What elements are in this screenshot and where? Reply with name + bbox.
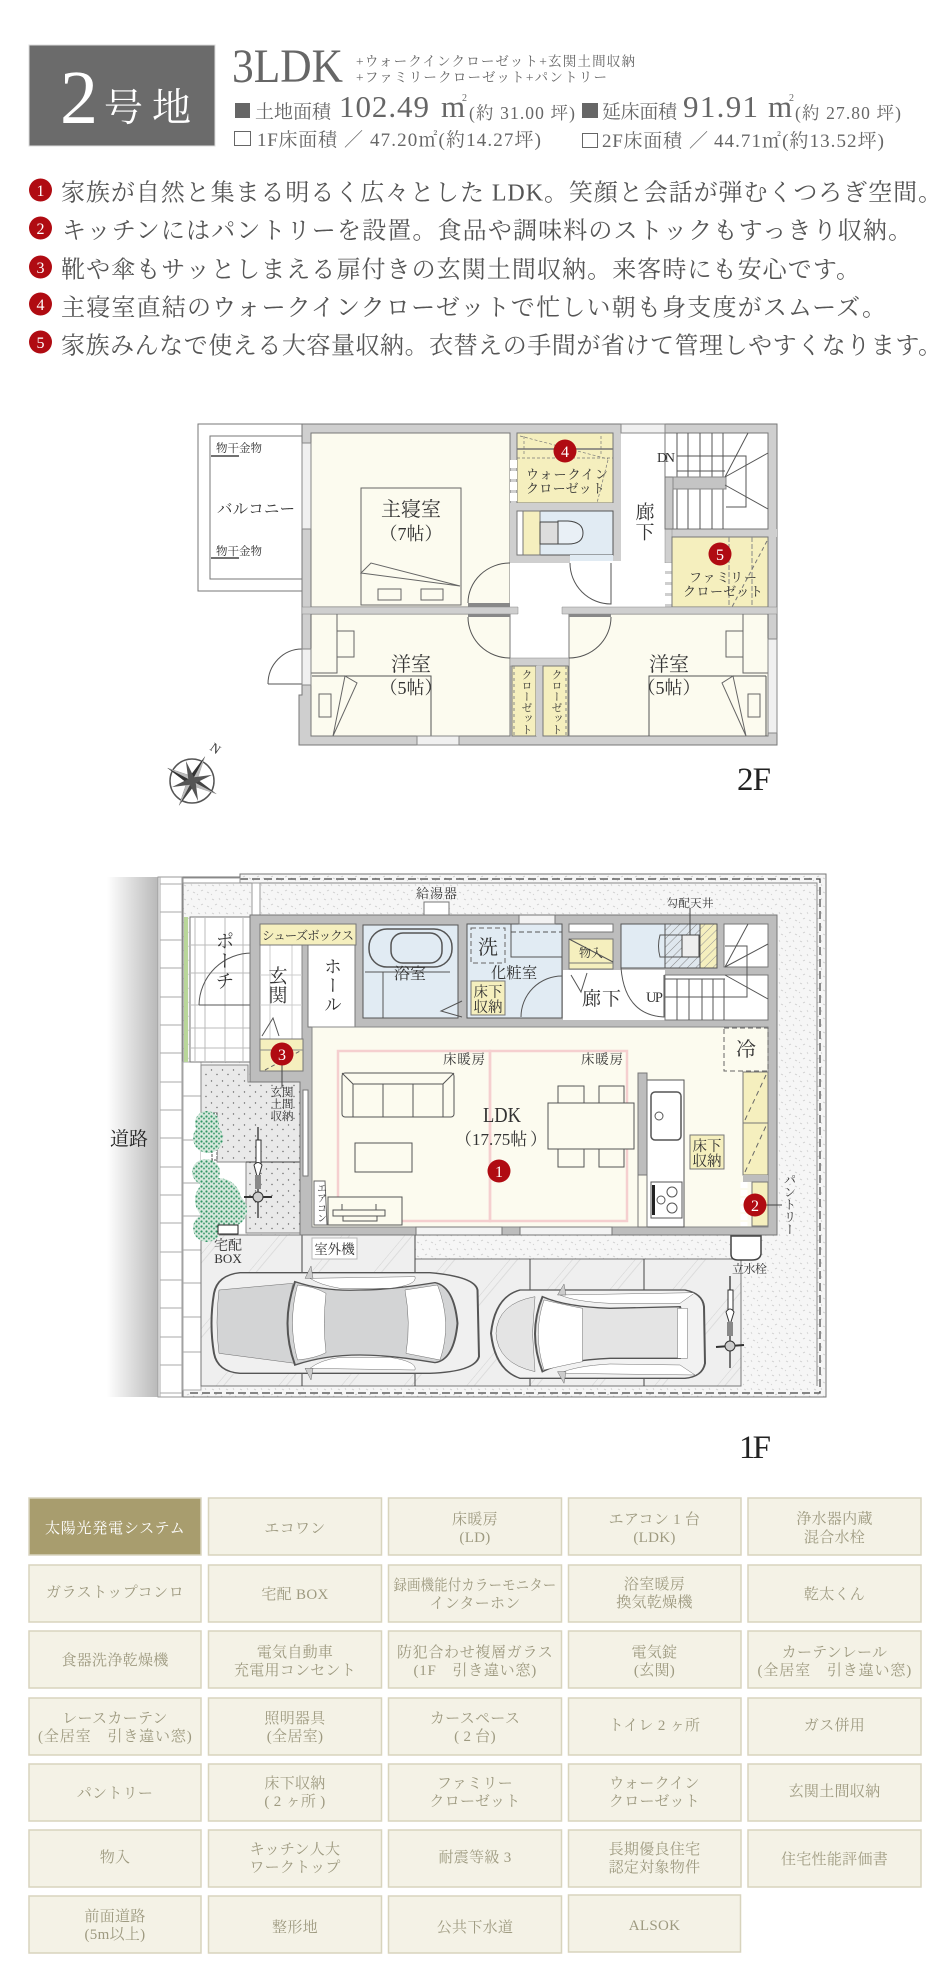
tv board xyxy=(328,1197,402,1225)
tag: public sewer xyxy=(388,1896,562,1953)
tag: glass cooktop xyxy=(29,1565,201,1622)
tag: public sewer: 公共下水道 xyxy=(437,1919,513,1936)
feature 5: 家族みんなで使える大容量収納。衣替えの手間が省けて管理しやすくなります。 xyxy=(61,332,942,360)
bicycle 1 xyxy=(244,1127,272,1218)
tag: car space: カースペース xyxy=(430,1711,520,1727)
bicycle 2 xyxy=(716,1276,744,1368)
corridor 1F: 物入 xyxy=(579,945,603,960)
walk-in closet: クローゼット xyxy=(526,481,605,496)
stairs 2F: DN xyxy=(657,451,675,466)
tag: two toilets: トイレ 2 ヶ所 xyxy=(609,1717,700,1734)
compass: N xyxy=(207,739,224,758)
parcel box xyxy=(214,1225,242,1266)
tag: family closet xyxy=(388,1764,562,1821)
bedroom closets: クローゼット xyxy=(520,669,532,735)
tag: security glass xyxy=(388,1631,562,1688)
underfloor storage: 収納 xyxy=(474,999,502,1016)
land area: m xyxy=(441,89,465,124)
tag: lace curtain xyxy=(29,1698,201,1755)
tag: air conditioner: (LDK) xyxy=(633,1530,676,1546)
tag: kitchen worktop: ワークトップ xyxy=(249,1859,341,1876)
tag: ALSOK xyxy=(568,1895,740,1952)
master bedroom: （7帖） xyxy=(380,524,442,544)
tag: seismic grade xyxy=(388,1830,562,1887)
callout 1 xyxy=(488,1160,510,1182)
plan type heading: 3LDK xyxy=(232,40,343,93)
tag: bathroom heater: 換気乾燥機 xyxy=(616,1593,693,1611)
balcony: 物干金物 xyxy=(216,544,262,558)
powder room: 化粧室 xyxy=(491,964,537,982)
callout 5: 5 xyxy=(716,547,724,564)
stairs 1F xyxy=(646,924,768,1020)
tag: car space: ( 2 台) xyxy=(454,1728,496,1745)
corridor: 廊下 xyxy=(632,502,654,542)
tag: electric lock: (玄関) xyxy=(634,1661,675,1679)
LDK: 17.75帖 xyxy=(472,1130,527,1149)
parking area xyxy=(201,1235,741,1386)
tag: electric lock xyxy=(568,1631,741,1688)
family closet: クローゼット xyxy=(683,584,763,599)
entry and hall: ホール xyxy=(322,957,342,1014)
family closet xyxy=(665,529,777,607)
toilet 1F: 勾配天井 xyxy=(666,896,714,910)
tag: front road: 前面道路 xyxy=(84,1908,146,1925)
tag: lace curtain: (全居室 引き違い窓) xyxy=(38,1727,192,1745)
2F floor area: 2F床面積 xyxy=(602,130,684,152)
2F floor area: ／ xyxy=(689,130,708,152)
tag: gas xyxy=(748,1698,921,1755)
entry storage: 土間 xyxy=(270,1097,294,1111)
tag: eco one xyxy=(208,1498,382,1555)
feature 2: キッチンにはパントリーを設置。食品や調味料のストックもすっきり収納。 xyxy=(62,218,912,244)
tag: performance report: 住宅性能評価書 xyxy=(781,1851,888,1868)
tag: intercom xyxy=(388,1565,562,1622)
tag: bathroom heater xyxy=(568,1565,741,1622)
tag: electric lock: 電気錠 xyxy=(632,1644,677,1661)
kitchen xyxy=(638,1028,768,1227)
tag: long-life housing xyxy=(568,1830,741,1887)
powder room: 洗 xyxy=(478,936,498,959)
lot boundary xyxy=(183,874,826,1397)
LDK: ） xyxy=(530,1130,547,1149)
callout 1: 1 xyxy=(495,1164,503,1181)
tag: dishwasher xyxy=(29,1631,201,1688)
exterior walls xyxy=(299,424,777,745)
2F floor area xyxy=(582,130,884,152)
floor label 1F: 1F xyxy=(739,1430,771,1466)
tag: regular plot xyxy=(208,1896,382,1953)
bedroom west: （5帖） xyxy=(380,678,442,698)
tag: air conditioner: エアコン 1 台 xyxy=(609,1511,700,1528)
feature 3: 靴や傘もサッとしまえる扉付きの玄関土間収納。来客時にも安心です。 xyxy=(61,256,860,284)
tag: water faucet: 浄水器内蔵 xyxy=(796,1510,873,1528)
sofa xyxy=(342,1073,454,1117)
feature list xyxy=(29,178,942,360)
callout 4: 4 xyxy=(561,444,569,461)
underfloor storage xyxy=(690,1135,724,1170)
floor heating zones xyxy=(338,1051,627,1221)
land area: 2 xyxy=(462,93,467,104)
2F floor area: 44.71㎡(約13.52坪) xyxy=(714,130,884,152)
total floor area: 2 xyxy=(789,93,794,104)
tag: walk-in closet: クローゼット xyxy=(609,1794,700,1810)
feature 4: 主寝室直結のウォークインクローゼットで忙しい朝も身支度がスムーズ。 xyxy=(61,294,886,322)
header badge: lot number: 号地 xyxy=(104,87,191,130)
bedroom closets xyxy=(510,658,569,736)
callout 2: 2 xyxy=(751,1198,759,1215)
tag: glass cooktop: ガラストップコンロ xyxy=(46,1584,184,1601)
walk-in closet xyxy=(514,433,613,503)
tag: underfloor storage: ( 2 ヶ所 ) xyxy=(264,1793,326,1810)
bedroom closets: クローゼット xyxy=(550,669,562,735)
total floor area: m xyxy=(768,89,792,124)
tag: walk-in closet xyxy=(568,1764,741,1821)
bedroom west: 洋室 xyxy=(391,653,431,676)
tag: solar power xyxy=(29,1498,201,1555)
bedroom east: （5帖） xyxy=(638,678,700,698)
tag: front road xyxy=(29,1896,201,1953)
total floor area: (約 27.80 坪) xyxy=(795,103,901,123)
floor plan 1F xyxy=(107,874,826,1397)
tag: car space xyxy=(388,1698,562,1755)
underfloor storage: 収納 xyxy=(692,1153,722,1170)
toilet 2F xyxy=(510,503,621,563)
tag: floor heating xyxy=(388,1498,562,1555)
fridge: 冷 xyxy=(736,1038,756,1061)
floor plan 2F xyxy=(198,424,777,745)
feature 2: 2 xyxy=(36,221,44,238)
air conditioner: エアコン xyxy=(314,1183,326,1223)
total floor area xyxy=(582,89,901,124)
callout 2 xyxy=(744,1194,766,1216)
tag: floor heating: 床暖房 xyxy=(452,1511,498,1528)
tag: curtain rail xyxy=(748,1631,921,1688)
bedroom west xyxy=(311,614,510,736)
tag: walk-in closet: ウォークイン xyxy=(609,1776,700,1792)
plan type heading: +ファミリークローゼット+パントリー xyxy=(356,70,607,85)
header badge: lot number: 2 xyxy=(60,56,98,140)
tag: seismic grade: 耐震等級 3 xyxy=(438,1849,512,1866)
feature 1: 家族が自然と集まる明るく広々とした LDK。笑顔と会話が弾むくつろぎ空間。 xyxy=(61,180,942,206)
pantry xyxy=(743,1072,796,1236)
tag: solar power: 太陽光発電システム xyxy=(45,1520,185,1537)
tag: lace curtain: レースカーテン xyxy=(62,1711,168,1727)
plan type heading: +ウォークインクローゼット+玄関土間収納 xyxy=(356,53,635,69)
header badge: lot number xyxy=(29,45,215,146)
1F floor area xyxy=(234,129,541,151)
1F floor area: 47.20㎡(約14.27坪) xyxy=(370,129,541,151)
tag: two toilets xyxy=(568,1698,741,1755)
floor heating zones: 床暖房 xyxy=(443,1051,485,1067)
tag: curtain rail: (全居室 引き違い窓) xyxy=(758,1661,912,1679)
coffee table xyxy=(355,1143,412,1172)
balcony xyxy=(198,424,302,591)
exterior details 1F: 室外機 xyxy=(314,1241,355,1257)
tag: dishwasher: 食器洗浄乾燥機 xyxy=(61,1651,169,1669)
parcel box: BOX xyxy=(214,1251,242,1266)
floor heating zones: 床暖房 xyxy=(581,1051,623,1067)
compass xyxy=(154,739,230,819)
tag: kitchen worktop: キッチン人大 xyxy=(250,1841,340,1858)
tag: floor heating: (LD) xyxy=(459,1530,491,1546)
porch: ポーチ xyxy=(212,931,234,991)
road xyxy=(107,877,158,1397)
corridor 1F xyxy=(563,924,665,1020)
tag: underfloor storage xyxy=(208,1764,382,1821)
pantry: パントリー xyxy=(782,1173,796,1236)
tag: front road: (5m以上) xyxy=(85,1926,145,1943)
master bedroom: 主寝室 xyxy=(381,498,441,521)
tag: gas dryer xyxy=(748,1565,921,1622)
equipment grid xyxy=(29,1498,921,1953)
dining set xyxy=(548,1086,634,1167)
tag: lighting: 照明器具 xyxy=(264,1710,326,1727)
tag: gas: ガス併用 xyxy=(804,1717,865,1734)
fridge xyxy=(724,1028,768,1071)
car 2 xyxy=(491,1284,705,1383)
1F floor area: 1F床面積 xyxy=(257,129,339,151)
corridor 1F: 廊下 xyxy=(582,988,622,1010)
underfloor storage xyxy=(471,981,505,1016)
tag: air conditioner xyxy=(568,1498,741,1555)
feature 4: 4 xyxy=(36,297,44,314)
total floor area: 91.91 xyxy=(683,89,758,124)
bedroom east: 洋室 xyxy=(649,653,689,676)
1F floor area: ／ xyxy=(344,129,363,151)
corridor xyxy=(510,433,665,658)
front strip xyxy=(183,1062,201,1390)
feature 5: 5 xyxy=(36,335,44,352)
tag: water faucet xyxy=(748,1498,921,1555)
tag: entry storage: 玄関土間収納 xyxy=(789,1782,880,1800)
exterior details 1F: 給湯器 xyxy=(416,886,457,901)
family closet: ファミリー xyxy=(689,570,757,585)
floor label 2F: 2F xyxy=(737,762,771,798)
underfloor storage: 床下 xyxy=(474,984,502,1001)
tag: EV outlet: 電気自動車 xyxy=(257,1643,333,1661)
LDK: （ xyxy=(455,1130,472,1149)
tag: curtain rail: カーテンレール xyxy=(782,1645,887,1661)
callout 3: 3 xyxy=(278,1047,286,1064)
balcony: 物干金物 xyxy=(216,441,262,455)
tag: parcel box: 宅配 BOX xyxy=(261,1586,329,1603)
underfloor storage: 床下 xyxy=(692,1138,722,1155)
sidewalk xyxy=(158,877,182,1397)
tag: storage xyxy=(29,1830,201,1887)
exterior details 1F: 立水栓 xyxy=(732,1261,767,1276)
tag: bathroom heater: 浴室暖房 xyxy=(624,1575,685,1593)
tag: family closet: クローゼット xyxy=(429,1794,521,1810)
tag: pantry xyxy=(29,1764,201,1821)
tag: eco one: エコワン xyxy=(264,1521,326,1537)
land area: (約 31.00 坪) xyxy=(469,103,575,123)
house walls 1F xyxy=(250,915,777,1235)
tag: pantry: パントリー xyxy=(77,1786,153,1802)
tag: parcel box xyxy=(208,1565,382,1622)
exterior details 1F xyxy=(303,886,767,1276)
tag: EV outlet: 充電用コンセント xyxy=(234,1662,356,1679)
entry storage: 収納 xyxy=(270,1109,294,1123)
tag: storage: 物入 xyxy=(100,1848,130,1866)
tag: ALSOK: ALSOK xyxy=(629,1918,680,1934)
gravel bed xyxy=(201,1065,300,1233)
LDK xyxy=(312,1027,768,1227)
balcony: バルコニー xyxy=(217,501,295,518)
entry storage: 玄関 xyxy=(270,1085,294,1099)
stairs 2F xyxy=(657,433,768,529)
parcel box: 宅配 xyxy=(214,1237,242,1254)
LDK: LDK xyxy=(483,1103,521,1127)
land area: 102.49 xyxy=(339,89,429,124)
bedroom east xyxy=(569,614,768,736)
tag: lighting: (全居室) xyxy=(267,1727,323,1745)
feature 1: 1 xyxy=(36,183,44,200)
walk-in closet: ウォークイン xyxy=(526,467,608,482)
tag: security glass: (1F 引き違い窓) xyxy=(414,1661,536,1679)
tag: gas dryer: 乾太くん xyxy=(804,1585,865,1603)
car 1 xyxy=(212,1266,479,1380)
master bedroom xyxy=(311,433,510,607)
tag: entry storage xyxy=(748,1764,921,1821)
bathroom xyxy=(363,925,462,1018)
entry and hall xyxy=(260,924,356,1039)
land area: 土地面積 xyxy=(255,101,333,123)
tag: performance report xyxy=(748,1830,921,1887)
tag: kitchen worktop xyxy=(208,1830,382,1887)
tag: family closet: ファミリー xyxy=(437,1776,513,1792)
interior walls and doors 2F xyxy=(268,424,777,745)
entry and hall: 玄関 xyxy=(266,966,287,1004)
plan type heading xyxy=(232,40,635,93)
bathroom: 浴室 xyxy=(394,965,426,983)
tag: long-life housing: 長期優良住宅 xyxy=(609,1841,700,1858)
entry storage xyxy=(260,1039,303,1123)
total floor area: 延床面積 xyxy=(602,101,679,123)
tag: EV outlet xyxy=(208,1631,382,1688)
tag: lighting xyxy=(208,1698,382,1755)
toilet 1F xyxy=(621,896,717,968)
stairs 1F: UP xyxy=(646,990,663,1006)
tag: long-life housing: 認定対象物件 xyxy=(609,1858,700,1876)
feature 3: 3 xyxy=(36,260,44,277)
tag: water faucet: 混合水栓 xyxy=(804,1529,865,1546)
entry and hall: シューズボックス xyxy=(262,929,354,943)
tag: underfloor storage: 床下収納 xyxy=(264,1775,326,1792)
land area xyxy=(235,89,575,124)
tag: regular plot: 整形地 xyxy=(272,1918,318,1936)
powder room xyxy=(467,924,562,1018)
tag: intercom: 録画機能付カラーモニター xyxy=(394,1577,556,1594)
porch xyxy=(184,917,252,1062)
tag: intercom: インターホン xyxy=(429,1595,521,1612)
road: 道路 xyxy=(110,1128,148,1150)
tag: security glass: 防犯合わせ複層ガラス xyxy=(397,1643,553,1661)
garden shrubs xyxy=(192,1111,247,1242)
